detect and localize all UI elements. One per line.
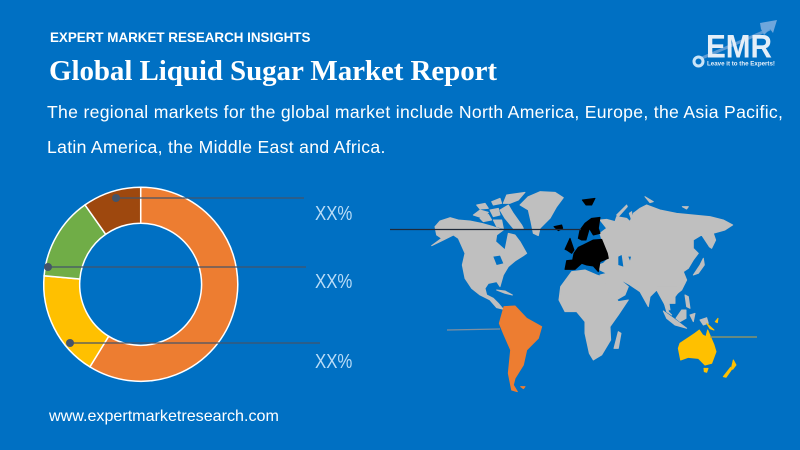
website url: www.expertmarketresearch.com	[49, 407, 279, 425]
world map	[390, 191, 757, 392]
Europe region	[554, 198, 608, 272]
leader line top	[112, 194, 304, 202]
map leader: Europe	[390, 228, 581, 230]
map leader: South America	[447, 329, 500, 330]
label: XX% bottom: XX%	[315, 351, 352, 373]
North America and Greenland	[432, 192, 563, 309]
logo: EMR: EMR	[706, 28, 772, 64]
leader line bottom	[66, 339, 320, 347]
description text: Latin America, the Middle East and Africa.	[47, 137, 386, 157]
logo: EMR: Leave it to the Experts!	[707, 60, 775, 68]
Southeast Asia islands	[657, 283, 708, 328]
segment: green	[44, 205, 106, 279]
segment: brown	[85, 187, 141, 234]
description text	[47, 102, 783, 157]
label: XX% middle: XX%	[315, 271, 352, 293]
Asia	[598, 197, 733, 310]
logo: EMR	[692, 20, 777, 68]
label: XX% top: XX%	[315, 203, 352, 225]
map leader: Oceania	[710, 336, 757, 338]
Oceania region	[678, 318, 736, 377]
South America region	[499, 306, 542, 392]
description text: The regional markets for the global market include North America, Europe, the Asia Pacific,	[47, 102, 783, 122]
eyebrow heading: EXPERT MARKET RESEARCH INSIGHTS	[50, 30, 310, 45]
Africa	[559, 270, 628, 360]
donut chart with leader lines	[43, 186, 320, 382]
title: Global Liquid Sugar Market Report	[49, 55, 497, 87]
segment: yellow	[44, 276, 109, 367]
segment: orange	[90, 187, 238, 381]
leader line middle	[44, 263, 306, 271]
